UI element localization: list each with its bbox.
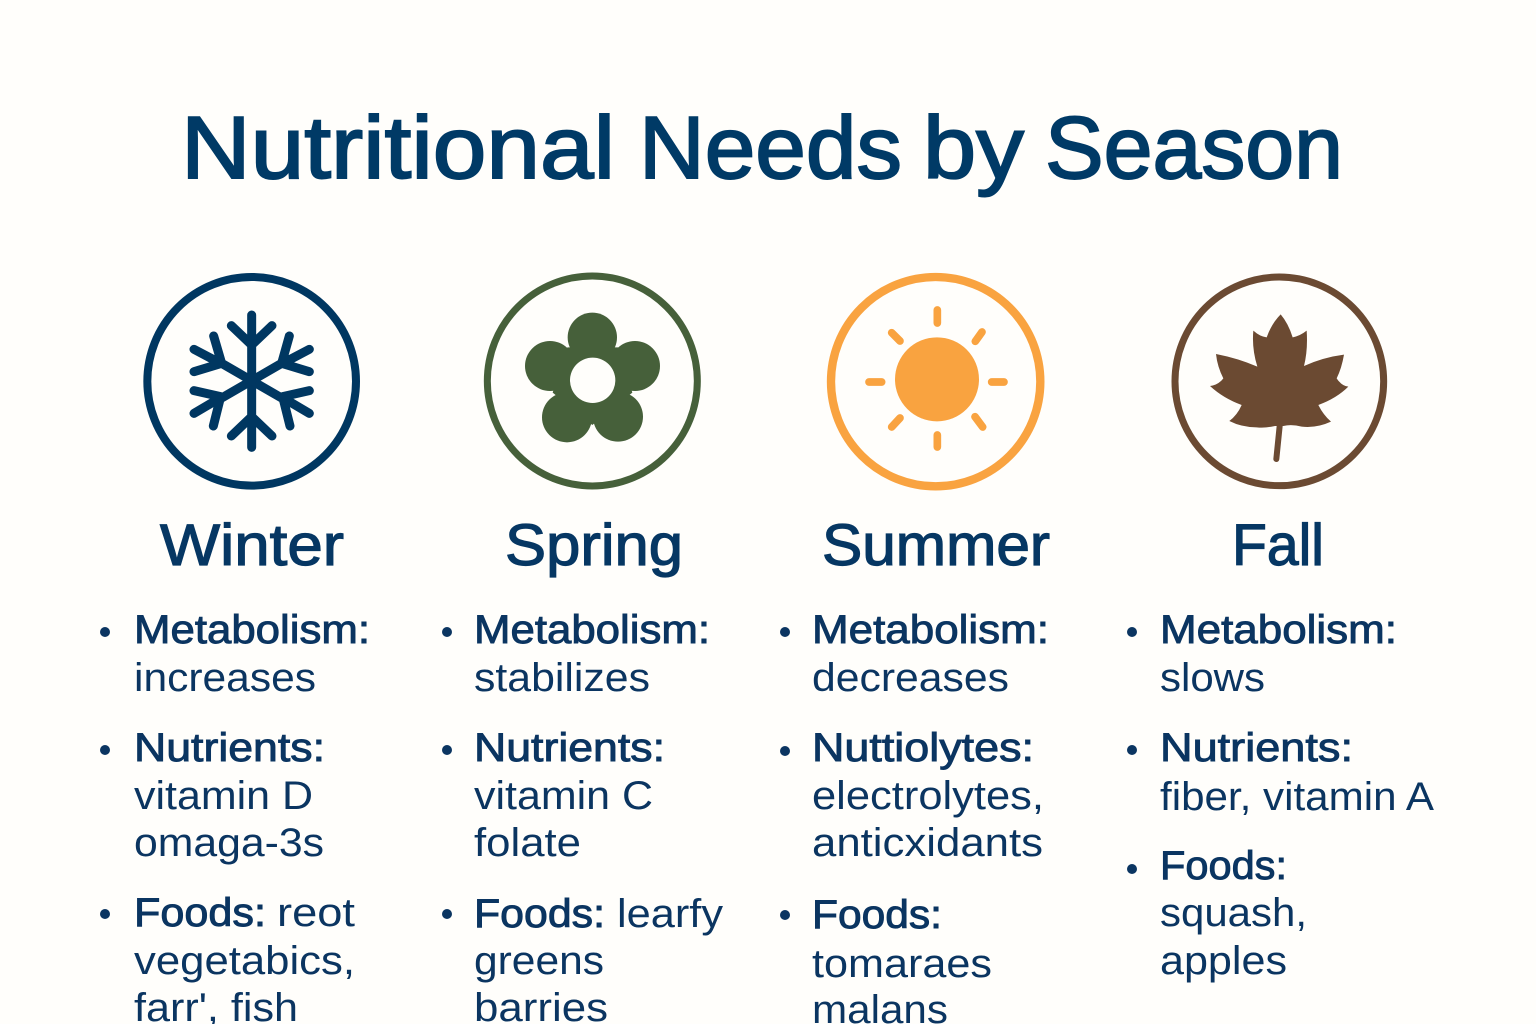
bullet list: winter: increases <box>134 656 316 700</box>
bullet list: spring: Nutrients: <box>474 726 665 770</box>
bullet list: winter: Nutrients: <box>134 726 325 770</box>
bullet list: summer: Metabolism: <box>812 608 1049 652</box>
title: Season <box>1045 98 1343 197</box>
icon: maple leaf in circle <box>1175 277 1384 486</box>
title: Needs <box>639 98 902 197</box>
panel: summer <box>780 277 1050 1024</box>
title: by <box>923 98 1024 197</box>
bullet list: winter: omaga-3s <box>134 821 324 865</box>
icon: sun in circle <box>831 277 1040 486</box>
bullet list: summer: anticxidants <box>812 821 1043 865</box>
heading: Spring: Spring <box>505 513 683 578</box>
bullet list: spring <box>442 608 723 1024</box>
icon: flower in circle <box>487 276 697 486</box>
bullet list: spring: folate <box>474 821 581 865</box>
bullet list: fall: Foods: <box>1160 844 1287 888</box>
bullet list: spring: vitamin C <box>474 774 653 818</box>
title: Nutritional <box>181 98 615 197</box>
bullet list: summer: Nuttiolytes: <box>812 726 1034 770</box>
bullet list: summer: tomaraes <box>812 942 992 986</box>
bullet list: fall: Nutrients: <box>1160 726 1353 770</box>
heading: Summer: Summer <box>822 513 1050 578</box>
bullet list: spring: Metabolism: <box>474 608 710 652</box>
bullet list: fall: apples <box>1160 939 1287 983</box>
bullet list: winter: Metabolism: <box>134 608 370 652</box>
bullet list: summer: electrolytes, <box>812 774 1044 818</box>
bullet list: winter <box>100 608 370 1024</box>
bullet list: winter: Foods: <box>134 891 266 935</box>
bullet list: spring: Foods: <box>474 892 605 936</box>
bullet list: spring: stabilizes <box>474 656 650 700</box>
bullet list: winter: reot <box>277 891 355 935</box>
bullet list: fall: slows <box>1160 656 1265 700</box>
bullet list: fall: squash, <box>1160 891 1307 935</box>
bullet list: fall: fiber, vitamin A <box>1160 775 1434 819</box>
bullet list: spring: learfy <box>617 892 723 936</box>
title <box>181 98 1343 197</box>
bullet list: winter: vegetabics, <box>134 939 355 983</box>
bullet list: summer <box>780 608 1049 1024</box>
bullet list: summer: decreases <box>812 656 1009 700</box>
bullet list: winter: vitamin D <box>134 774 313 818</box>
panel: spring <box>442 276 723 1024</box>
bullet list: fall <box>1127 608 1434 983</box>
bullet list: spring: greens <box>474 939 604 983</box>
heading: Fall: Fall <box>1232 513 1324 578</box>
panel: fall <box>1127 277 1434 983</box>
icon: snowflake in circle <box>147 277 356 486</box>
bullet list: summer: Foods: <box>812 893 942 937</box>
panel: winter <box>100 277 370 1024</box>
bullet list: fall: Metabolism: <box>1160 608 1397 652</box>
heading: Winter: Winter <box>160 513 344 578</box>
